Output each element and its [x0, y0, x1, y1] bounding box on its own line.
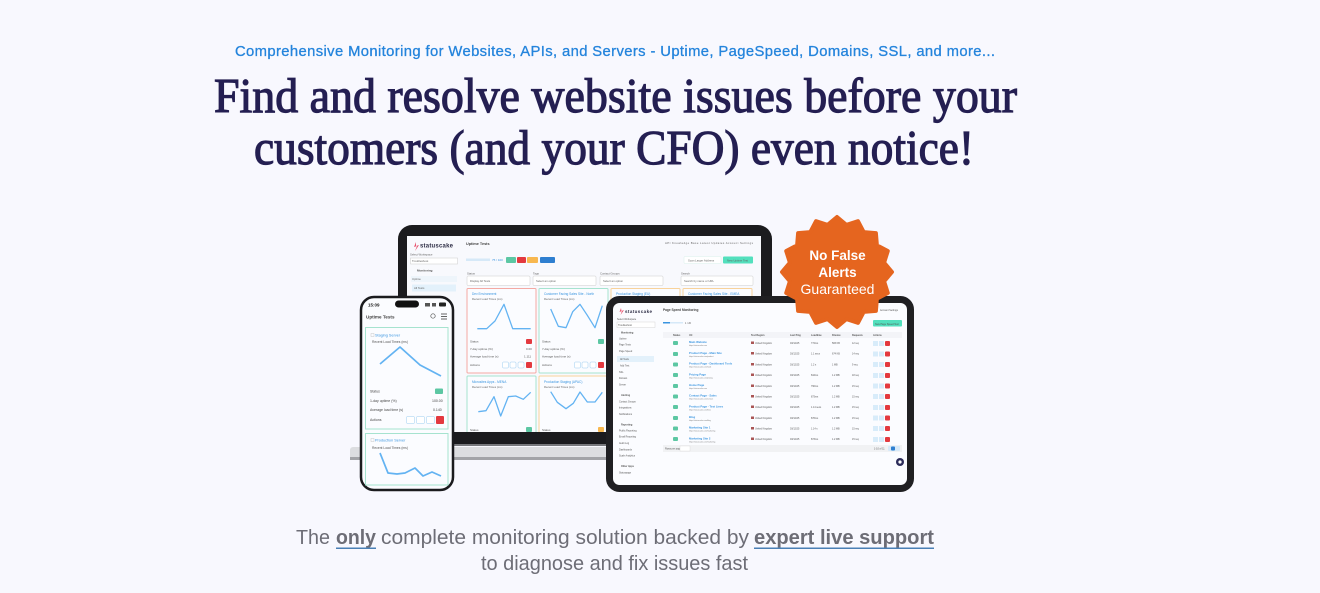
table row 10: United Kingdom: [755, 438, 772, 441]
badge: No False Alerts Guaranteed: Alerts: [818, 265, 857, 280]
table header: Url: [689, 334, 693, 337]
table header: Last Ping: [790, 334, 801, 337]
laptop logo: [414, 242, 454, 251]
table row 4: 03/12/25: [790, 374, 800, 377]
tablet sidebar: Monitoring: [621, 332, 634, 334]
device: phone: [361, 297, 453, 490]
table header: [663, 332, 902, 338]
tablet sidebar: Dashboards: [619, 448, 633, 452]
laptop sidebar: All Tests: [414, 286, 425, 290]
badge: No False Alerts Guaranteed: [782, 217, 892, 327]
laptop sidebar: Uptime: [412, 277, 421, 281]
laptop card: production staging APAC: Status: [542, 428, 551, 432]
tablet sidebar: Domain: [619, 377, 628, 380]
tablet usage meter: [663, 322, 692, 325]
laptop status summary: [466, 257, 555, 263]
tablet sidebar: Email Reporting: [619, 436, 637, 438]
phone card: staging server: Staging Server: [375, 334, 401, 338]
table row 9: 03/12/25: [790, 428, 800, 430]
table row 4: https://statuscake.com/pricing: [689, 376, 713, 379]
phone card: staging server: 0.140: [433, 408, 442, 412]
table row 7: 03/12/25: [790, 406, 800, 409]
phone card: staging server: 1-day uptime (%): [370, 399, 397, 403]
tablet sidebar: Reporting: [621, 424, 633, 426]
table row 3: 1 MB: [832, 364, 838, 366]
laptop card: customer facing sales site: Actions: [542, 363, 552, 367]
table row 5: 15 req: [852, 385, 859, 388]
laptop action buttons: Scan Larger Address: [688, 258, 715, 262]
table pagination: Rows per page:: [665, 448, 682, 450]
laptop card: customer facing sales site EMEA: Customer Facing Sales Site - EMEA: [688, 292, 740, 296]
laptop filter row: Contact Groups: [600, 272, 620, 276]
laptop logo: statuscake: [420, 244, 454, 250]
tablet sidebar: Scale Analytics: [619, 454, 636, 458]
laptop card: production staging EU: [611, 288, 680, 318]
table header: Loadtime: [811, 334, 822, 337]
laptop card: dev environment, down: Actions: [470, 363, 480, 367]
table row 1: 12 req: [852, 342, 859, 345]
laptop sidebar: Monitoring: [417, 268, 433, 272]
laptop action buttons: [684, 256, 753, 264]
laptop card: dev environment, down: 0.00: [526, 347, 532, 351]
laptop page title: Uptime Tests: [466, 242, 490, 246]
laptop card: production staging APAC: [539, 376, 608, 432]
table row 6: 15 req: [852, 396, 859, 398]
tagline: The: [296, 526, 330, 549]
laptop filter row: Display All Tests: [470, 279, 491, 283]
tagline: complete monitoring solution backed by: [381, 526, 750, 549]
tablet sidebar: Select Workspace: [617, 318, 637, 321]
table row 5: [673, 383, 890, 390]
table row 4: Pricing Page: [689, 372, 706, 376]
tablet usage meter: 1 / 20: [685, 322, 692, 325]
laptop sidebar: Select Workspace: [410, 252, 433, 256]
table row 8: [673, 415, 890, 422]
table row 8: 03/12/25: [790, 417, 800, 420]
tagline: [296, 526, 934, 575]
tablet sidebar: Contact Groups: [619, 400, 637, 404]
table row 3: 9 req: [852, 364, 858, 366]
table row 6: Contact Page - Sales: [689, 394, 717, 398]
table header: Status: [673, 334, 681, 337]
table row 3: Product Page - Dashboard Tools: [689, 362, 733, 366]
laptop action buttons: New Uptime Test: [727, 258, 748, 262]
table row 3: https://statuscake.com/tools: [689, 366, 711, 369]
tablet sidebar: Alerting: [621, 394, 631, 397]
eyebrow text: Comprehensive Monitoring for Websites, APIs, and Servers - Uptime, PageSpeed, Domains, SSL, and more...: [235, 44, 995, 60]
table row 5: Home Page: [689, 383, 705, 387]
table row 3: 1.2 s: [811, 364, 817, 366]
table row 3: United Kingdom: [755, 364, 772, 366]
phone card: staging server: [366, 328, 448, 429]
main heading: [214, 68, 1017, 175]
tablet sidebar: Add Test: [620, 364, 630, 368]
table row 2: 1.1 secs: [811, 352, 821, 356]
phone card: staging server: Actions: [370, 418, 382, 422]
table row 9: 1.2 MB: [832, 428, 840, 430]
table row 10: [673, 436, 890, 443]
device: laptop: [350, 225, 772, 460]
table row 6: 1.2 MB: [832, 396, 840, 398]
table header: Test Region: [751, 334, 765, 337]
table row 2: 674 KB: [832, 352, 840, 356]
laptop filter row: Select an option: [603, 279, 624, 283]
tagline: expert live support: [754, 526, 934, 549]
phone card: production server: [366, 434, 448, 485]
badge: No False Alerts Guaranteed: No False: [809, 248, 866, 263]
phone card: production server: Recent Load Times (ms): [372, 446, 408, 450]
table row 9: 15 req: [852, 428, 859, 430]
phone status bar: [368, 300, 446, 308]
table row 7: [673, 404, 890, 411]
table row 8: 1.2 MB: [832, 417, 840, 420]
tablet logo: [620, 308, 652, 315]
laptop status summary: 75 / 100: [492, 258, 503, 262]
tablet logo: statuscake: [625, 309, 652, 314]
table row 5: 1.2 MB: [832, 385, 840, 388]
tablet sidebar: SSL: [619, 371, 624, 374]
tagline: to diagnose and fix issues fast: [481, 552, 748, 575]
phone card: staging server: 100.00: [432, 399, 443, 403]
table row 6: https://statuscake.com/contact: [689, 398, 714, 401]
laptop card: dev environment, down: Recent Load Times (ms): [472, 297, 503, 301]
phone card: staging server: Recent Load Times (ms): [372, 340, 408, 344]
table row 1: Main Website: [689, 340, 707, 344]
table row 7: https://statuscake.com/lines: [689, 408, 711, 411]
laptop card: customer facing sales site: [539, 288, 608, 373]
main heading: Find and resolve website issues before your: [214, 68, 1017, 123]
table row 3: [673, 362, 890, 369]
phone card: production server: Production Server: [375, 438, 406, 442]
laptop filter row: Search: [681, 272, 690, 276]
laptop card: production staging APAC: Recent Load Times (ms): [544, 385, 575, 389]
table pagination: [663, 445, 902, 452]
table row 1: [673, 340, 890, 347]
device: tablet: [610, 300, 910, 488]
table row 6: United Kingdom: [755, 396, 772, 398]
table row 7: United Kingdom: [755, 406, 772, 409]
laptop card: customer facing sales site: Recent Load Times (ms): [544, 297, 575, 301]
table row 9: [673, 426, 890, 433]
tagline: only: [336, 526, 377, 549]
table row 6: 873ms: [811, 396, 819, 398]
table row 1: https://statuscake.com: [689, 344, 707, 347]
laptop card: customer facing sales site: 7-day uptime (%): [542, 347, 565, 351]
tablet sidebar: Integrations: [619, 406, 632, 410]
table row 4: 1.2 MB: [832, 374, 840, 377]
table header: Actions: [873, 334, 882, 337]
table row 1: United Kingdom: [755, 342, 772, 345]
main heading: customers (and your CFO) even notice!: [254, 120, 974, 175]
laptop card: microsites: Recent Load Times (ms): [472, 385, 503, 389]
table row 7: 1.14 secs: [811, 406, 822, 409]
tablet sidebar: Uptime: [619, 338, 627, 340]
tablet sidebar: Notifications: [619, 413, 633, 416]
table row 8: United Kingdom: [755, 417, 772, 420]
laptop card: dev environment, down: 7-day uptime (%): [470, 347, 493, 351]
tablet new test button: New Page Speed Test: [875, 323, 899, 326]
phone card: staging server: Average load time (s): [370, 408, 403, 412]
table row 9: 1.14 s: [811, 428, 818, 430]
tablet sidebar: Audit Log: [619, 442, 630, 445]
table row 10: 873ms: [811, 438, 819, 441]
tablet new test button: [873, 320, 902, 326]
laptop card: dev environment, down: Status: [470, 340, 479, 344]
laptop sidebar: Troubleshoot: [412, 259, 428, 263]
badge: No False Alerts Guaranteed: Guaranteed: [801, 281, 874, 297]
phone shell: [361, 297, 453, 490]
laptop filter row: Tags: [533, 272, 540, 276]
laptop filter row: Search by name or URL: [684, 279, 714, 283]
laptop card: dev environment, down: Average load time (s): [470, 354, 498, 358]
table row 7: Product Page - Test Lines: [689, 404, 724, 408]
tablet account menu: Account Settings: [880, 309, 899, 312]
tablet chat icon: [896, 458, 904, 466]
table row 2: [673, 351, 890, 358]
table row 6: 03/12/25: [790, 396, 800, 398]
table row 2: https://statuscake.com/product: [689, 355, 714, 358]
tablet shell: [610, 300, 910, 488]
laptop card: customer facing sales site: Customer Facing Sales Site - North: [544, 292, 594, 296]
table row 10: https://statuscake.com/marketing: [689, 440, 715, 443]
tablet sidebar: Public Reporting: [619, 430, 637, 432]
tablet sidebar: All Tests: [620, 358, 630, 361]
laptop card: production staging APAC: Production Staging (APAC): [544, 380, 582, 384]
tablet sidebar: Other Apps: [621, 465, 635, 468]
tablet sidebar: Page Speed: [619, 350, 633, 353]
table row 8: https://statuscake.com/blog: [689, 419, 711, 422]
table row 5: https://statuscake.com: [689, 387, 707, 390]
table row 3: 03/12/25: [790, 364, 800, 366]
table row 10: Marketing Site 2: [689, 436, 711, 440]
table row 6: [673, 394, 890, 401]
laptop card: microsites: Microsites Apps - MENA: [472, 380, 507, 384]
table row 4: United Kingdom: [755, 374, 772, 377]
table row 4: [673, 372, 890, 379]
table row 2: 03/12/25: [790, 352, 800, 356]
table row 1: 772ms: [811, 342, 819, 345]
tablet table: [663, 332, 902, 452]
laptop card: dev environment, down: Dev Environment: [472, 292, 497, 296]
table row 5: United Kingdom: [755, 385, 772, 388]
phone page title: Uptime Tests: [366, 314, 395, 320]
laptop card: customer facing sales site EMEA: [683, 288, 752, 318]
table row 2: Product Page - Main Site: [689, 351, 722, 355]
laptop card: dev environment, down: [467, 288, 536, 373]
table row 9: Marketing Site 1: [689, 426, 711, 430]
laptop card: customer facing sales site: Status: [542, 340, 551, 344]
tablet sidebar: [617, 318, 655, 474]
table row 8: Blog: [689, 415, 696, 419]
table row 1: 03/12/25: [790, 342, 800, 345]
laptop card: microsites: Status: [470, 428, 479, 432]
laptop nav links: API Knowledge Base Latest Updates Account Settings: [665, 241, 754, 245]
tablet sidebar: Server: [619, 384, 626, 386]
table header: Filesize: [832, 334, 841, 337]
laptop card: customer facing sales site: Average load time (s): [542, 354, 570, 358]
laptop filter row: [467, 272, 753, 286]
laptop filter row: Status: [467, 272, 476, 276]
laptop screen: [407, 236, 761, 432]
table row 8: 876ms: [811, 417, 819, 420]
phone status bar: 15:09: [368, 302, 380, 308]
table row 10: 1.2 MB: [832, 438, 840, 441]
table pagination: 1-10 of 11: [874, 448, 885, 450]
laptop card: production staging EU: Production Staging (EU): [616, 292, 650, 296]
tablet sidebar: Troubleshoot: [618, 324, 632, 327]
table row 5: 790ms: [811, 385, 819, 388]
table header: Requests: [852, 334, 863, 337]
table row 7: 15 req: [852, 406, 859, 409]
table row 2: 14 req: [852, 352, 859, 356]
table row 4: 18 req: [852, 374, 859, 377]
laptop card: dev environment, down: 1.111: [524, 354, 531, 358]
table row 9: United Kingdom: [755, 428, 772, 430]
table row 1: 583 KB: [832, 342, 840, 345]
tablet sidebar: Page Tests: [619, 344, 632, 346]
laptop filter row: Select an option: [536, 279, 557, 283]
phone card: staging server: Status: [370, 390, 380, 394]
laptop base: [350, 443, 612, 460]
laptop bezel: [398, 225, 772, 444]
phone page title: [366, 314, 447, 320]
table row 7: 1.2 MB: [832, 406, 840, 409]
table row 9: https://statuscake.com/marketing: [689, 430, 715, 433]
table row 10: 03/12/25: [790, 438, 800, 441]
table row 2: United Kingdom: [755, 352, 772, 356]
table row 5: 03/12/25: [790, 385, 800, 388]
tablet page title: Page Speed Monitoring: [663, 308, 698, 312]
tablet sidebar: Statuspage: [619, 472, 632, 474]
table row 8: 15 req: [852, 417, 859, 420]
table row 10: 15 req: [852, 438, 859, 441]
table row 4: 844ms: [811, 374, 819, 377]
laptop card: microsites: [467, 376, 536, 432]
laptop sidebar: [410, 252, 458, 292]
